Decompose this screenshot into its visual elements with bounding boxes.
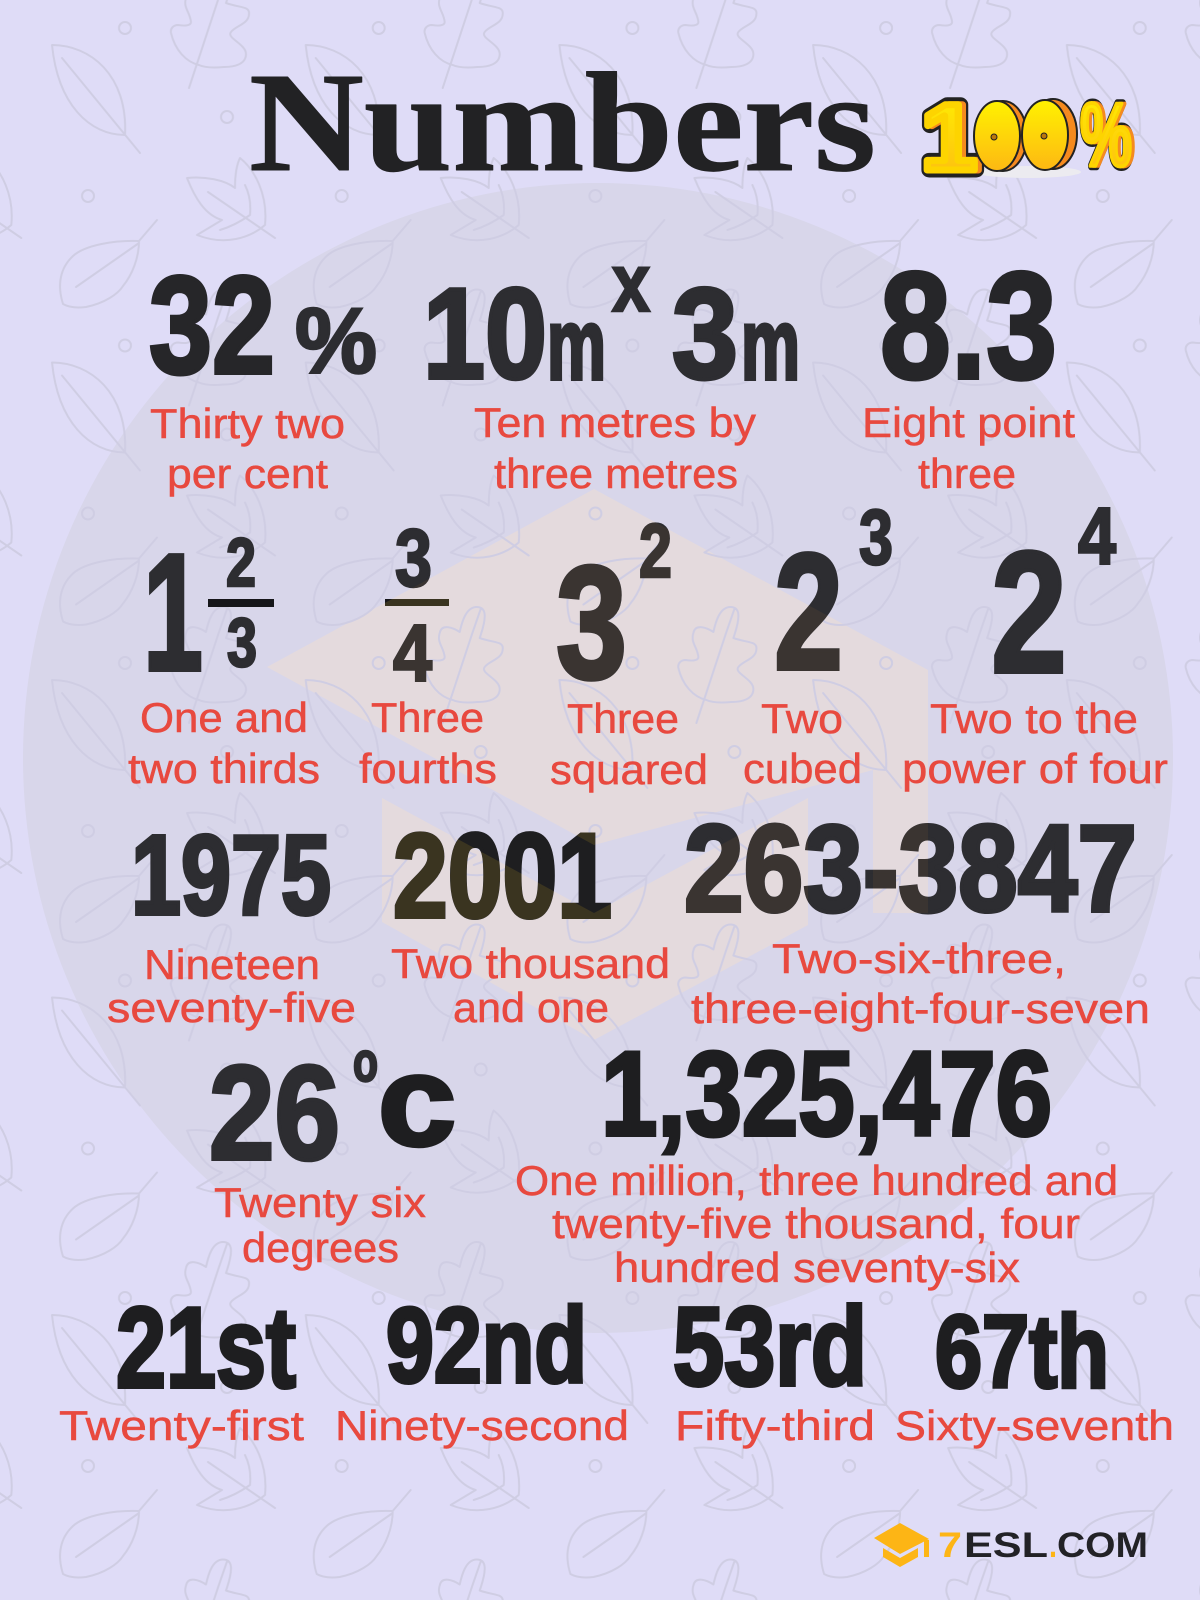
caption: three metres [494,450,738,497]
icon: 100% badge: % [1081,86,1133,186]
mixed number: 2 [226,524,256,601]
mixed number: 1 [143,520,203,706]
number: 32 [149,248,275,403]
wordmark: . [1049,1526,1057,1565]
item: one and two thirds [128,520,320,792]
number: 92nd [386,1285,587,1405]
icon: graduation cap [874,1523,929,1567]
graduation cap watermark [267,489,928,1040]
number: 10m: 10 [423,262,547,406]
multiplication sign: x [612,238,650,329]
caption [107,941,356,1031]
power: 2 [774,520,843,705]
caption [515,1157,1118,1291]
caption [902,695,1168,792]
temperature: 26 [209,1039,340,1188]
mixed number: 3 [227,604,257,681]
item: 8.3 [862,241,1075,497]
wordmark: 7 [938,1526,962,1565]
caption: One million, three hundred and [515,1157,1118,1204]
caption: three-eight-four-seven [691,985,1150,1032]
caption: and one [453,984,609,1031]
number: 67th [935,1294,1109,1409]
temperature: c [378,1030,456,1173]
caption: Fifty-third [675,1402,875,1449]
item: large number [515,1027,1118,1291]
item: phone number [684,801,1150,1032]
caption: squared [550,746,708,793]
power: 3 [556,533,627,713]
caption: cubed [743,745,862,792]
caption [474,399,756,497]
wordmark [938,1526,1148,1565]
power [774,493,893,705]
icon: 100% badge: 1 [921,85,977,191]
caption [743,695,862,792]
item: three fourths [359,513,497,792]
fraction [385,513,449,699]
caption: Thirty two [150,400,345,447]
item: 10m x 3m [423,238,800,497]
icon: 100% badge: % [1080,86,1132,186]
item: two cubed [743,493,893,792]
number: 10m: m [547,289,606,401]
caption [214,1179,426,1271]
number: 263-3847 [684,801,1137,938]
power: 2 [639,509,672,594]
fraction: 3 [395,513,432,604]
power [991,492,1116,709]
caption: seventy-five [107,984,356,1031]
cap tint over numerals [267,489,928,1040]
caption: Nineteen [144,941,320,988]
caption: Ninety-second [335,1402,629,1449]
item: 2001 [391,809,670,1031]
caption: Three [567,695,679,742]
caption [359,694,497,792]
caption: degrees [242,1224,399,1271]
number: 3m: 3 [672,262,738,406]
caption [550,695,708,793]
title: Numbers [249,43,876,201]
caption: three [918,450,1016,497]
caption: Sixty-seventh [895,1402,1174,1449]
item: three squared [550,509,708,793]
caption: Two [761,695,843,742]
caption: per cent [167,450,328,497]
item: 32 per cent [149,248,377,497]
number: 3m: m [741,289,800,401]
logo: 7ESL.COM [874,1523,1148,1567]
icon: 100% badge: 1 [923,85,979,191]
power: 4 [1078,492,1116,582]
item: 92nd [335,1285,629,1449]
number: 21st [116,1285,296,1412]
caption: Twenty-first [59,1402,304,1449]
icon: 100% badge [921,85,1135,191]
item: 21st [59,1285,304,1449]
number: 53rd [673,1285,867,1409]
item: 67th [895,1294,1174,1449]
temperature [209,1030,456,1188]
number: 8.3 [880,241,1057,411]
caption: twenty-five thousand, four [552,1200,1080,1247]
item: 1975 [107,812,356,1031]
caption: Twenty six [214,1179,426,1226]
icon: 100% badge: 1 [925,85,981,191]
caption: hundred seventy-six [614,1244,1020,1291]
power: 2 [991,515,1067,709]
background circle [23,183,1173,1333]
item: 53rd [673,1285,875,1449]
wordmark: COM [1057,1526,1148,1565]
percent sign: % [295,289,377,393]
caption: Ten metres by [474,399,756,446]
caption [128,694,320,792]
caption [691,935,1150,1032]
caption: Two-six-three, [772,935,1066,982]
temperature: o [353,1030,378,1093]
wordmark: ESL [964,1526,1048,1565]
item: two to the power of four [902,492,1168,792]
number: 1975 [131,812,331,938]
caption: Two thousand [391,940,670,987]
caption [391,940,670,1031]
caption: One and [140,694,308,741]
caption: power of four [902,745,1168,792]
icon: 100% badge: % [1083,86,1135,186]
caption: fourths [359,745,497,792]
caption: Three [371,694,484,741]
power: 3 [859,493,893,581]
caption [862,399,1075,497]
caption: two thirds [128,745,320,792]
caption [150,400,345,497]
power [556,509,672,713]
caption: Eight point [862,399,1075,446]
number: 3m [672,262,800,406]
number: 1,325,476 [601,1027,1052,1161]
item: 26 degrees [209,1030,456,1271]
number: 2001 [393,809,612,943]
fraction: 4 [393,609,432,699]
caption: Two to the [930,695,1138,742]
